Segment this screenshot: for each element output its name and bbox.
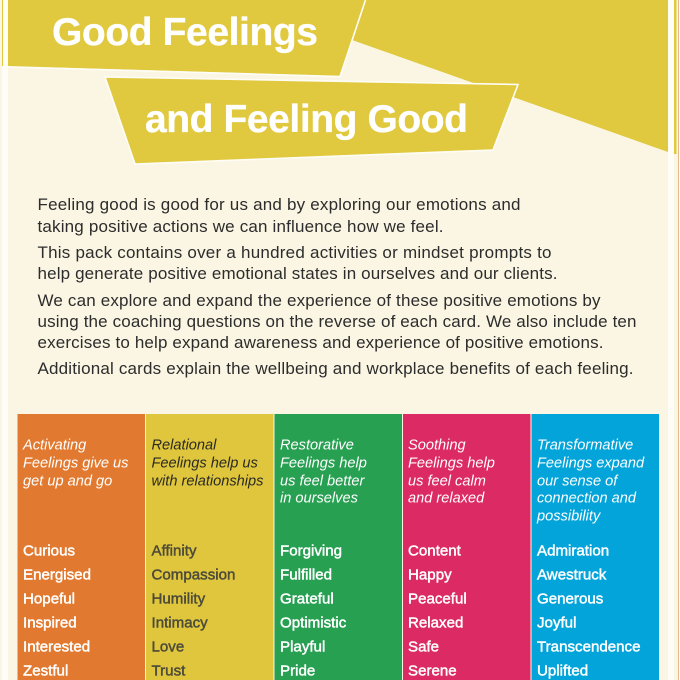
panel: soothing feelings: Happy xyxy=(408,566,452,584)
panel: transformative feelings: Generous xyxy=(537,590,603,608)
panel: transformative feelings: our sense of xyxy=(537,474,619,490)
panel: soothing feelings: Serene xyxy=(408,662,457,680)
panel: soothing feelings: Peaceful xyxy=(408,590,467,608)
intro text: We can explore and expand the experience of these positive emotions by xyxy=(38,291,601,310)
panel: restorative feelings: Pride xyxy=(280,662,315,680)
panel: soothing feelings: Safe xyxy=(408,638,439,656)
panel: soothing feelings: Content xyxy=(408,542,462,560)
panel: restorative feelings: Feelings help xyxy=(280,456,367,472)
title line one: Good Feelings xyxy=(52,11,318,54)
panel: activating feelings: Curious xyxy=(23,542,75,560)
panel: relational feelings: Feelings help us xyxy=(152,456,258,472)
panel: transformative feelings: Transformative xyxy=(537,438,633,454)
panel: transformative feelings: connection and xyxy=(537,490,637,506)
panel: activating feelings: Interested xyxy=(23,638,90,656)
panel: activating feelings: Hopeful xyxy=(23,590,75,608)
panel: transformative feelings: Admiration xyxy=(537,542,609,560)
panel: activating feelings: Energised xyxy=(23,566,91,584)
panel: transformative feelings: Uplifted xyxy=(537,662,588,680)
header yellow wedge xyxy=(352,0,668,152)
panel: transformative feelings: Joyful xyxy=(537,614,576,632)
intro text: using the coaching questions on the reverse of each card. We also include ten xyxy=(38,312,636,331)
intro text: taking positive actions we can influence how we feel. xyxy=(38,217,444,236)
panel: transformative feelings: Transcendence xyxy=(537,638,640,656)
panel: transformative feelings xyxy=(532,414,659,680)
panel: relational feelings: Humility xyxy=(152,590,206,608)
title line two: and Feeling Good xyxy=(145,98,468,141)
panel: restorative feelings: in ourselves xyxy=(280,490,358,506)
title banner: and Feeling Good xyxy=(105,77,518,164)
panel: activating feelings: Inspired xyxy=(23,614,77,632)
intro text xyxy=(38,195,636,378)
panel: soothing feelings: Feelings help xyxy=(408,456,495,472)
panel: activating feelings: Activating xyxy=(22,438,86,454)
panel: soothing feelings: and relaxed xyxy=(408,490,485,506)
panel: soothing feelings: us feel calm xyxy=(408,474,486,490)
panel: transformative feelings: possibility xyxy=(536,508,602,524)
panel: relational feelings: Affinity xyxy=(152,542,197,560)
panel: activating feelings: Zestful xyxy=(23,662,68,680)
intro text: exercises to help expand awareness and experience of positive emotions. xyxy=(38,333,604,352)
panel: restorative feelings: us feel better xyxy=(280,474,366,490)
panel: restorative feelings: Fulfilled xyxy=(280,566,332,584)
panel: relational feelings: with relationships xyxy=(152,474,263,490)
panel: restorative feelings xyxy=(274,414,402,680)
panel: soothing feelings: Relaxed xyxy=(408,614,463,632)
panel: soothing feelings xyxy=(403,414,530,680)
title banner: Good Feelings xyxy=(8,0,366,76)
panel: restorative feelings: Optimistic xyxy=(280,614,347,632)
panel: transformative feelings: Awestruck xyxy=(537,566,607,584)
panel: transformative feelings: Feelings expand xyxy=(537,456,645,472)
panel: restorative feelings: Forgiving xyxy=(280,542,342,560)
panel: relational feelings: Compassion xyxy=(152,566,235,584)
panel: relational feelings: Love xyxy=(152,638,184,656)
intro text: This pack contains over a hundred activities or mindset prompts to xyxy=(38,243,552,262)
panel: restorative feelings: Playful xyxy=(280,638,325,656)
panel: soothing feelings: Soothing xyxy=(408,438,466,454)
panel: relational feelings: Relational xyxy=(152,438,217,454)
panel: activating feelings xyxy=(18,414,145,680)
panel: activating feelings: Feelings give us xyxy=(23,456,128,472)
panel: activating feelings: get up and go xyxy=(23,474,112,490)
panel: relational feelings: Intimacy xyxy=(152,614,208,632)
intro text: Additional cards explain the wellbeing and workplace benefits of each feeling. xyxy=(38,359,634,378)
panel: relational feelings: Trust xyxy=(152,662,186,680)
panel: restorative feelings: Restorative xyxy=(280,438,354,454)
intro text: Feeling good is good for us and by exploring our emotions and xyxy=(38,195,520,214)
panel: restorative feelings: Grateful xyxy=(280,590,334,608)
intro text: help generate positive emotional states in ourselves and our clients. xyxy=(38,264,558,283)
panel: relational feelings xyxy=(146,414,274,680)
